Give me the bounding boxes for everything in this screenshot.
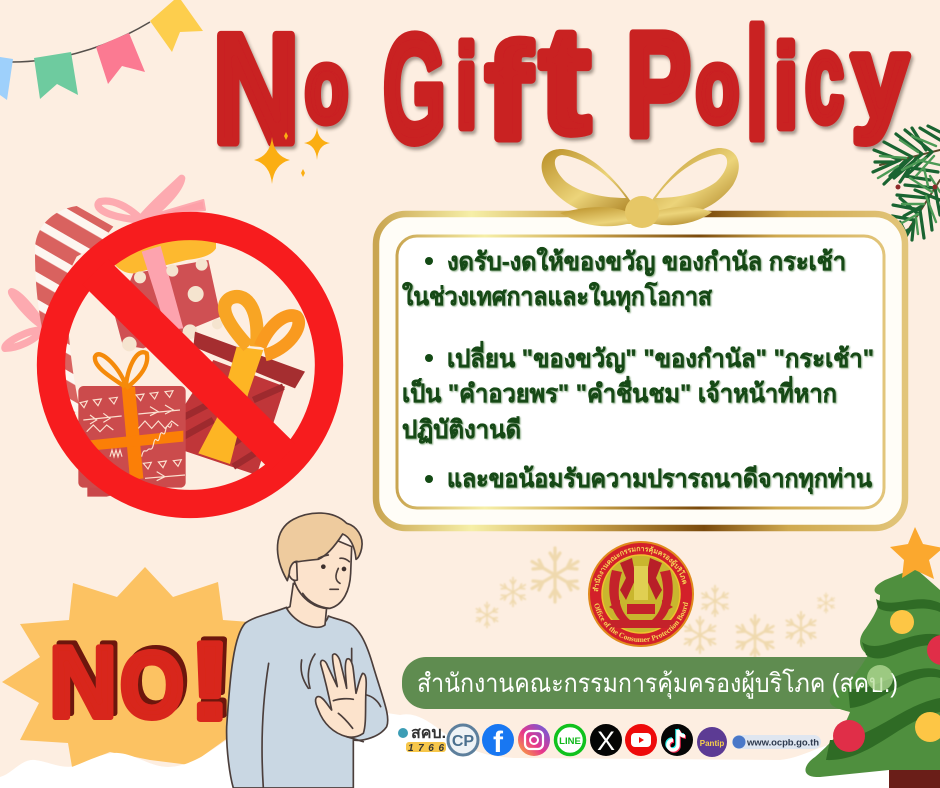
title: l xyxy=(746,0,768,172)
man refusing gesture xyxy=(227,513,388,788)
icon: line: LINE xyxy=(559,736,581,747)
icon: CPB: CP xyxy=(452,733,474,750)
seal emblem xyxy=(588,541,694,647)
green name bar xyxy=(402,657,902,709)
snowflakes xyxy=(476,548,834,659)
white cloud xyxy=(0,700,940,788)
title: N xyxy=(212,2,300,175)
pine branch xyxy=(873,126,940,240)
christmas tree xyxy=(805,527,940,788)
bullet 1 xyxy=(402,246,846,313)
icon: facebook xyxy=(482,724,514,759)
bullet 3: และขอน้อมรับความปรารถนาดีจากทุกท่าน xyxy=(447,465,872,495)
icon: x: X xyxy=(597,726,615,756)
icon: pantip xyxy=(697,727,727,757)
bullet 2: เปลี่ยน "ของขวัญ" "ของกำนัล" "กระเช้า" xyxy=(447,341,874,373)
title: c xyxy=(805,10,844,148)
NO! lettering: N xyxy=(49,627,117,739)
title: o xyxy=(305,29,348,143)
NO! lettering: ! xyxy=(188,620,232,743)
icon: x xyxy=(590,724,622,756)
icon: youtube xyxy=(625,724,657,756)
hair xyxy=(277,513,362,581)
ear xyxy=(288,562,297,580)
outer frame xyxy=(376,214,905,528)
seal emblem: สำนักงานคณะกรรมการคุ้มครองผู้บริโภค xyxy=(592,546,686,592)
polka gift xyxy=(115,233,223,351)
bullet 1: งดรับ-งดให้ของขวัญ ของกำนัล กระเช้า xyxy=(447,246,846,276)
sparkles xyxy=(254,127,330,184)
patterned front gift xyxy=(78,352,186,497)
icon: line xyxy=(556,726,584,754)
title: i xyxy=(774,21,798,152)
bunting xyxy=(0,0,203,100)
website link: www.ocpb.go.th xyxy=(746,738,819,748)
website link xyxy=(732,735,821,749)
title: f xyxy=(486,16,532,167)
title: P xyxy=(626,3,691,167)
gift frame panel xyxy=(376,148,905,528)
bullet 2: ปฏิบัติงานดี xyxy=(402,416,521,444)
no symbol xyxy=(51,226,329,504)
title: G xyxy=(383,4,446,174)
face xyxy=(294,533,352,608)
gifts and prohibition sign xyxy=(5,178,329,504)
NO! lettering: O xyxy=(120,633,184,737)
inner frame xyxy=(397,236,884,508)
social media row xyxy=(398,724,821,759)
bullet 2 xyxy=(402,341,874,444)
dark red gift xyxy=(182,297,305,475)
tree star xyxy=(890,527,940,579)
title: y xyxy=(852,12,908,144)
hotline logo: 1766 xyxy=(408,743,444,754)
ornaments xyxy=(833,610,940,752)
seal emblem: Office of the Consumer Protection Board xyxy=(594,602,688,642)
striped gift xyxy=(35,206,113,417)
hotline logo: สคบ. xyxy=(411,725,446,742)
gold bow xyxy=(542,148,739,228)
hotline logo xyxy=(398,725,446,754)
policy text xyxy=(402,246,874,495)
bullet 1: ในช่วงเทศกาลและในทุกโอกาส xyxy=(402,281,713,313)
shirt xyxy=(227,607,388,788)
icon: instagram xyxy=(518,724,550,756)
icon: pantip: Pantip xyxy=(700,739,724,748)
pink bows xyxy=(5,178,205,348)
bullet 2: เป็น "คำอวยพร" "คำชื่นชม" เจ้าหน้าที่หาก xyxy=(402,376,837,408)
burst NO sign xyxy=(2,567,250,788)
title: t xyxy=(540,0,590,164)
hand xyxy=(316,654,366,737)
light ornament xyxy=(867,665,893,691)
icon: tiktok xyxy=(661,724,693,756)
title: o xyxy=(696,29,739,143)
icon: CPB xyxy=(448,725,478,755)
title: i xyxy=(456,21,477,152)
icon: facebook: f xyxy=(493,726,504,759)
neck xyxy=(287,583,327,627)
